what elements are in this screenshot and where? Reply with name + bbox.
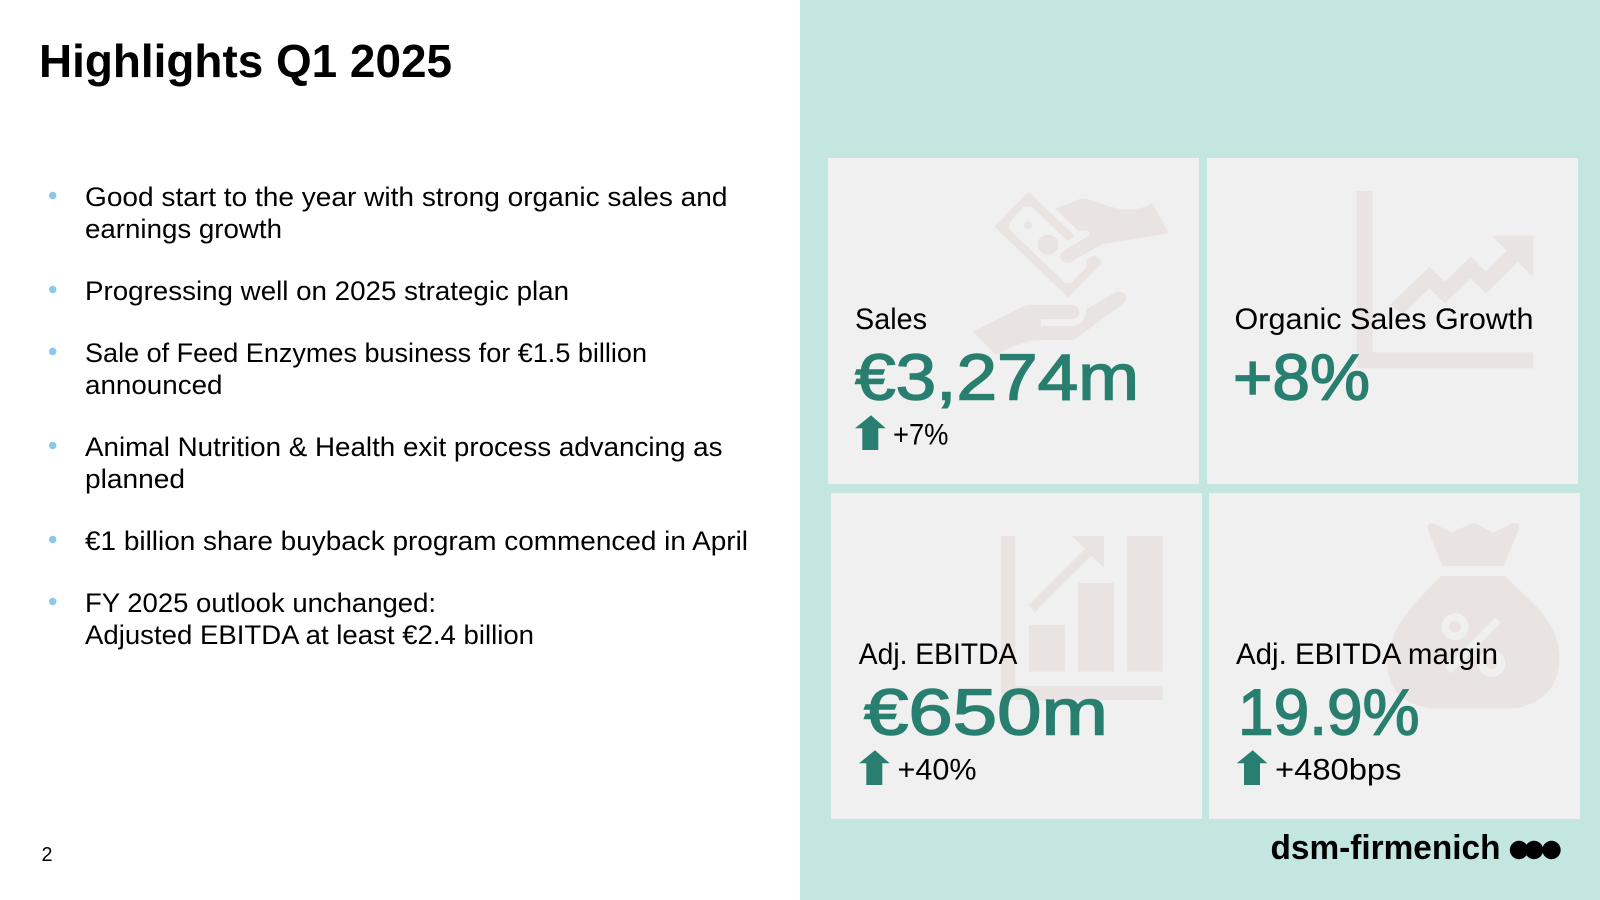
icon: bar chart with arrow: [1001, 536, 1163, 700]
bullet: feed enzymes sale: Sale of Feed Enzymes business for €1.5 billion: [85, 338, 647, 368]
label: adjusted EBITDA margin: Adj. EBITDA margin: [1236, 638, 1498, 671]
label: sales: Sales: [855, 303, 927, 336]
icon: up arrow: [1237, 750, 1267, 785]
bullet: outlook: Adjusted EBITDA at least €2.4 billion: [85, 620, 534, 650]
panel: adjusted EBITDA card: [831, 493, 1202, 819]
value: organic growth: +8%: [1233, 340, 1370, 413]
bullet: feed enzymes sale: [49, 338, 647, 400]
icon: money changing hands: [973, 192, 1169, 355]
panel: sales card: [828, 158, 1199, 484]
panel: right teal background: [800, 0, 1600, 900]
value: adjusted EBITDA: €650m: [864, 675, 1108, 748]
panel: organic sales growth card: [1207, 158, 1578, 484]
label: adjusted EBITDA: Adj. EBITDA: [859, 638, 1018, 671]
icon: up arrow: [855, 415, 886, 450]
icon: money bag with percent: [1387, 523, 1559, 708]
change: margin: +480bps: [1275, 754, 1402, 787]
bullet: organic sales and earnings growth: earnings growth: [85, 214, 282, 244]
panel: adjusted EBITDA margin card: [1209, 493, 1580, 819]
bullet: animal nutrition exit: Animal Nutrition & Health exit process advancing as: [85, 432, 722, 462]
icon: growth line chart: [1357, 191, 1533, 368]
bullet: animal nutrition exit: [49, 432, 722, 494]
bullet: organic sales and earnings growth: [49, 182, 728, 244]
value: adjusted EBITDA margin: 19.9%: [1238, 675, 1420, 748]
logo: dsm-firmenich: dsm-firmenich: [1270, 829, 1500, 867]
panel: left white background: [0, 0, 800, 900]
title: Highlights Q1 2025: [39, 35, 452, 87]
bullet: strategic plan: Progressing well on 2025 strategic plan: [85, 276, 569, 306]
bullet: outlook: [49, 588, 534, 650]
label: organic sales growth: Organic Sales Growth: [1234, 303, 1534, 336]
icon: up arrow: [859, 750, 890, 785]
bullet: animal nutrition exit: planned: [85, 464, 185, 494]
bullet: organic sales and earnings growth: Good start to the year with strong organic sales and: [85, 182, 728, 212]
bullet: feed enzymes sale: announced: [85, 370, 222, 400]
change: sales: +7%: [893, 419, 948, 452]
value: sales: €3,274m: [855, 340, 1139, 413]
bullet: share buyback: €1 billion share buyback program commenced in April: [85, 526, 748, 556]
change: adjusted EBITDA: +40%: [898, 754, 976, 787]
page number: 2: [42, 844, 52, 866]
bullet: outlook: FY 2025 outlook unchanged:: [85, 588, 436, 618]
bullet list: [49, 182, 748, 650]
